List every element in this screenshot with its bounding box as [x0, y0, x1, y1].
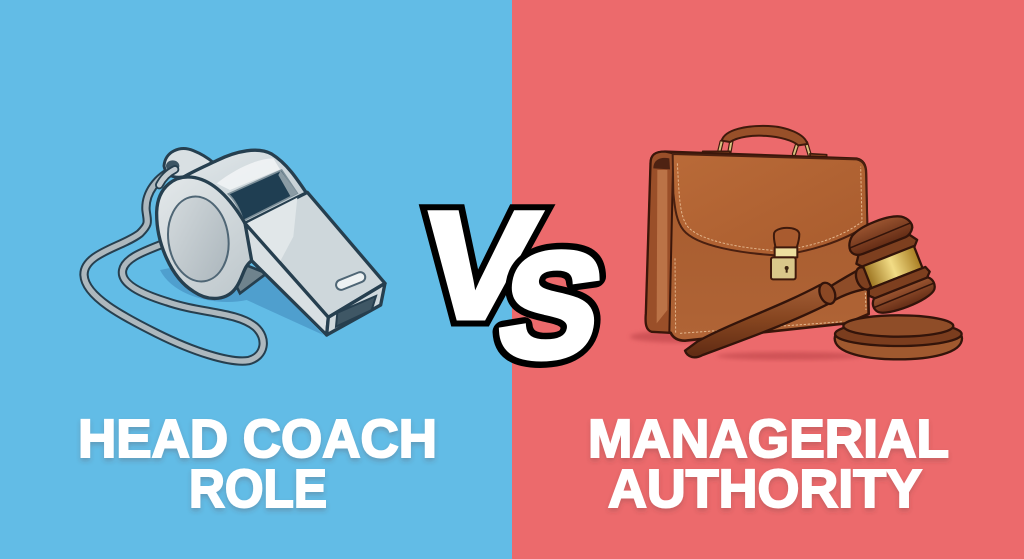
heading: Head Coach Role: HEAD COACH — [78, 409, 437, 469]
icon: leather briefcase and gavel — [630, 126, 962, 360]
whistle mouthpiece top — [245, 192, 385, 317]
briefcase handle — [703, 126, 827, 157]
heading: Head Coach Role: ROLE — [189, 459, 327, 519]
whistle disc — [163, 193, 234, 285]
heading: Head Coach Role — [78, 409, 437, 519]
letter V: V — [410, 181, 547, 351]
panel: red background — [512, 0, 1024, 559]
whistle barrel top — [160, 150, 307, 225]
briefcase clasp — [771, 228, 799, 279]
briefcase side gusset — [646, 152, 673, 333]
whistle mouthpiece side — [245, 223, 328, 335]
gavel head — [844, 209, 939, 319]
sound block — [835, 315, 962, 359]
briefcase flap — [673, 154, 867, 255]
lanyard cord — [84, 169, 263, 361]
letter V: V — [410, 181, 547, 351]
briefcase body — [646, 152, 869, 341]
gavel handle — [685, 265, 875, 357]
VS badge — [410, 181, 615, 389]
heading: Managerial Authority — [588, 409, 949, 519]
whistle mouth opening — [327, 283, 385, 335]
whistle back ring — [164, 149, 213, 177]
whistle lower neck shade — [233, 263, 267, 293]
letter S: S — [487, 221, 615, 389]
heading: Managerial Authority: MANAGERIAL — [588, 409, 949, 469]
whistle face — [157, 177, 327, 334]
whistle slot — [335, 271, 367, 291]
whistle air window — [228, 170, 297, 221]
icon: silver whistle with lanyard — [84, 149, 385, 361]
letter S: S — [487, 221, 615, 389]
heading: Managerial Authority: AUTHORITY — [608, 459, 922, 519]
panel: blue background — [0, 0, 512, 559]
